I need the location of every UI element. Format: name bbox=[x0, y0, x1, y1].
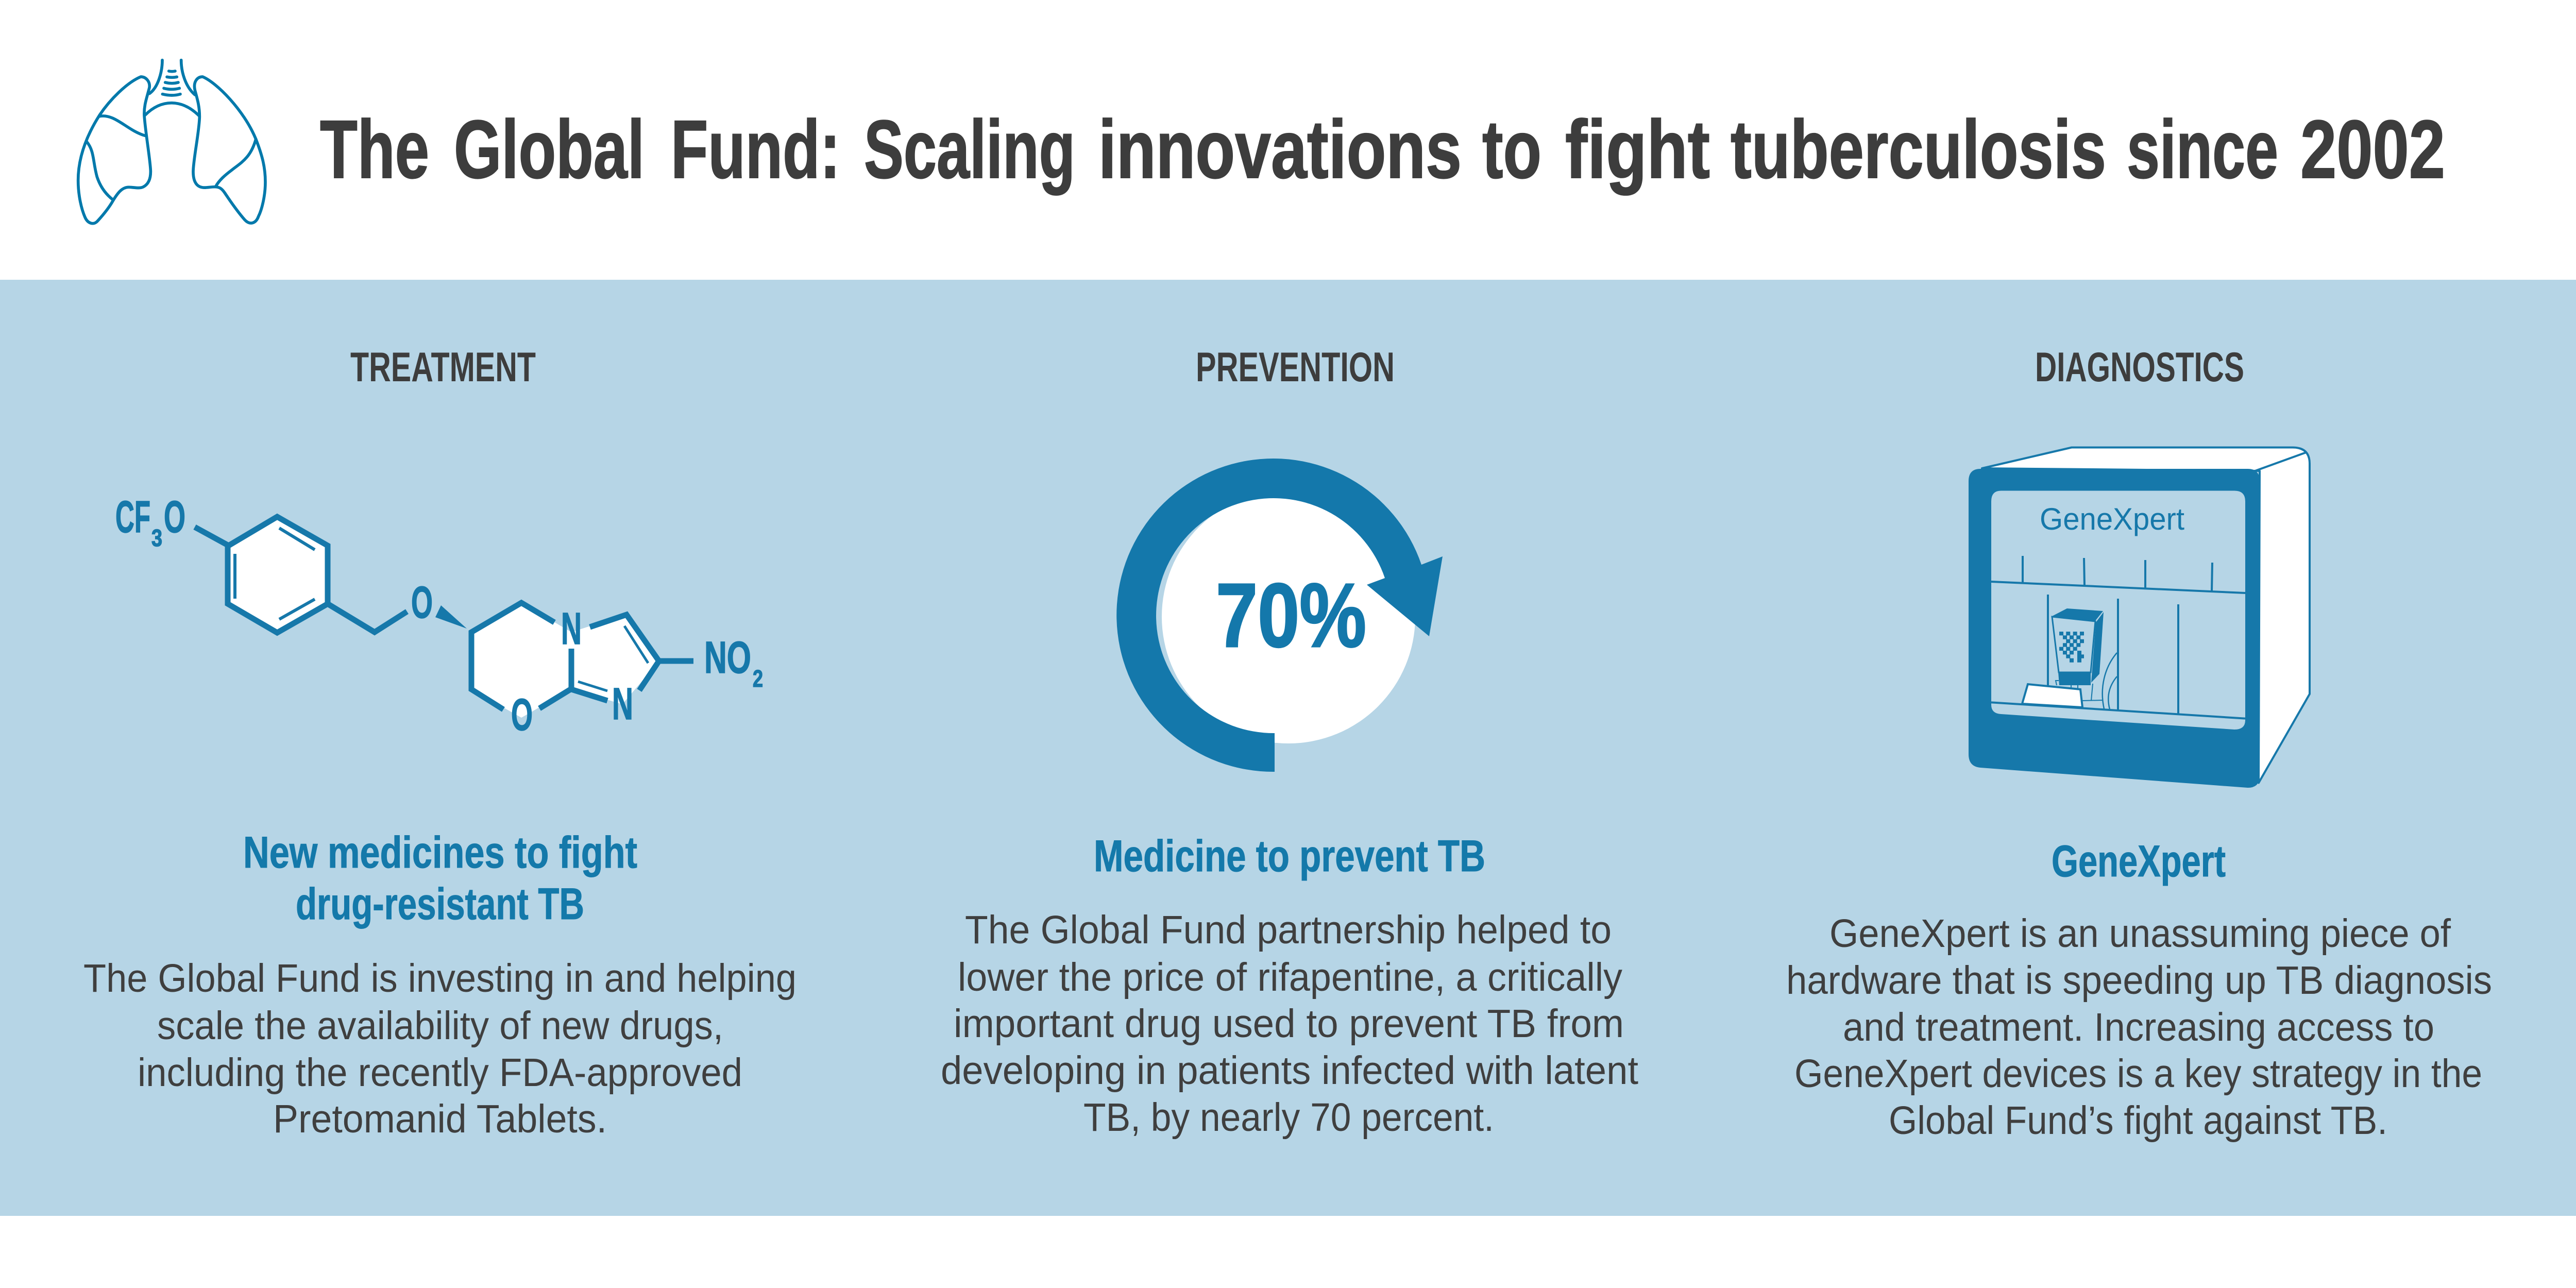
text block: treatment description: scale the availability of new drugs, bbox=[157, 1004, 723, 1048]
panel: blue background bbox=[0, 280, 2576, 1216]
chart: pretomanid molecule: O bbox=[511, 690, 533, 740]
text block: prevention description: developing in patients infected with latent bbox=[941, 1048, 1638, 1093]
label: CF3O: O bbox=[164, 492, 185, 542]
icon: GeneXpert machine bbox=[1969, 447, 2310, 788]
title: 2002 bbox=[2300, 103, 2445, 195]
text block: treatment description: The Global Fund is investing in and helping bbox=[83, 956, 796, 1001]
title bbox=[320, 103, 2445, 195]
label: CF3O: CF bbox=[115, 492, 150, 542]
text block: diagnostics description: hardware that is speeding up TB diagnosis bbox=[1786, 958, 2492, 1003]
chart: pretomanid molecule: N bbox=[612, 679, 633, 729]
title: Global bbox=[454, 103, 645, 195]
chart: pretomanid molecule bbox=[115, 492, 763, 740]
title: tuberculosis bbox=[1731, 103, 2106, 195]
title: since bbox=[2127, 103, 2278, 195]
text block: diagnostics description bbox=[1786, 911, 2492, 1143]
title: fight bbox=[1565, 103, 1710, 195]
icon: test cartridge bbox=[2022, 608, 2117, 709]
column: treatment bbox=[83, 344, 796, 1141]
text block: diagnostics description: and treatment. Increasing access to bbox=[1843, 1005, 2434, 1049]
text block: prevention description: lower the price of rifapentine, a critically bbox=[958, 955, 1622, 999]
text block: prevention description: TB, by nearly 70 percent. bbox=[1083, 1095, 1494, 1140]
text block: treatment description bbox=[83, 956, 796, 1141]
chart: pretomanid molecule: N bbox=[561, 604, 582, 654]
icon: 70 percent circular arrow bbox=[1116, 459, 1443, 772]
text block: treatment description: Pretomanid Tablets. bbox=[273, 1097, 607, 1141]
subheading: medicine to prevent TB: Medicine to prevent TB bbox=[1094, 832, 1485, 881]
number: 70%: 70% bbox=[1216, 565, 1366, 666]
subheading: new medicines: drug-resistant TB bbox=[296, 879, 584, 929]
text block: treatment description: including the recently FDA-approved bbox=[138, 1050, 742, 1095]
text block: prevention description: important drug used to prevent TB from bbox=[954, 1002, 1624, 1046]
heading: diagnostics: DIAGNOSTICS bbox=[2035, 344, 2244, 391]
label: CF3O: 3 bbox=[151, 524, 162, 551]
chart: pretomanid molecule: NO bbox=[704, 633, 751, 683]
title: Scaling bbox=[864, 103, 1075, 195]
subheading: GeneXpert: GeneXpert bbox=[2052, 837, 2226, 886]
text block: diagnostics description: Global Fund’s fight against TB. bbox=[1889, 1098, 2387, 1143]
title: innovations bbox=[1098, 103, 1462, 195]
label: GeneXpert on machine: GeneXpert bbox=[2040, 502, 2184, 536]
text block: diagnostics description: GeneXpert devices is a key strategy in the bbox=[1794, 1052, 2482, 1096]
text block: prevention description: The Global Fund partnership helped to bbox=[965, 908, 1612, 952]
column: prevention bbox=[941, 344, 1638, 1140]
chart: pretomanid molecule: 2 bbox=[753, 665, 763, 692]
title: The bbox=[320, 103, 429, 195]
text block: prevention description bbox=[941, 908, 1638, 1140]
column: diagnostics bbox=[1786, 344, 2492, 1143]
text block: diagnostics description: GeneXpert is an unassuming piece of bbox=[1829, 911, 2451, 956]
chart: pretomanid molecule: O bbox=[411, 578, 433, 628]
subheading: new medicines bbox=[243, 828, 637, 929]
heading: treatment: TREATMENT bbox=[350, 344, 536, 391]
icon: lungs bbox=[78, 60, 265, 224]
title: Fund: bbox=[671, 103, 840, 195]
heading: prevention: PREVENTION bbox=[1196, 344, 1395, 391]
title: to bbox=[1482, 103, 1541, 195]
subheading: new medicines: New medicines to fight bbox=[243, 828, 637, 877]
